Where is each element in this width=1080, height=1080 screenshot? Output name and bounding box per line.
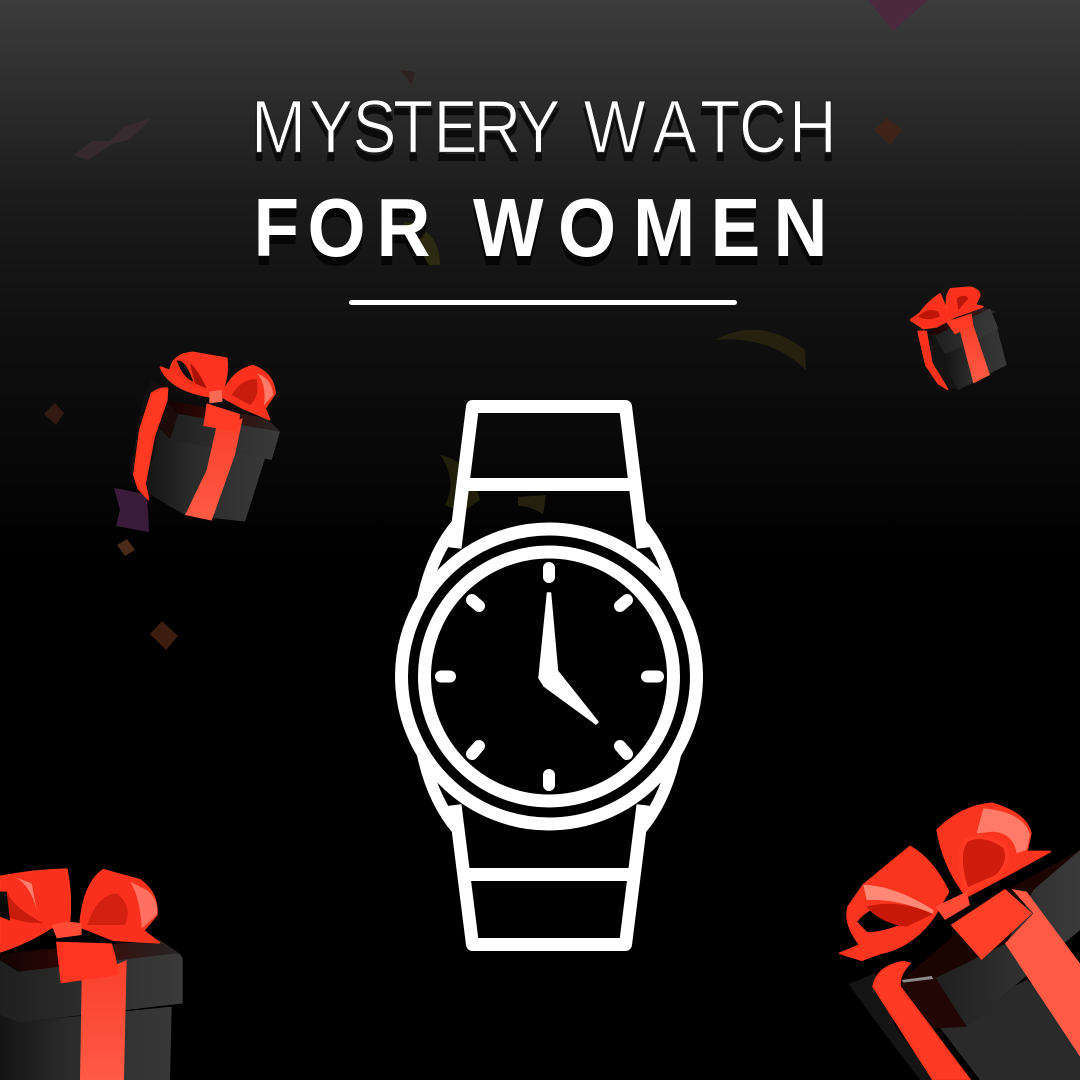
divider line under title <box>349 300 737 305</box>
gift: lower right <box>840 803 1080 1080</box>
title <box>251 85 837 274</box>
title line 2: FOR WOMEN: FOR WOMEN <box>254 181 827 274</box>
gift: lower left <box>0 869 183 1080</box>
gift: upper right <box>911 287 1007 390</box>
hour ticks <box>441 568 658 785</box>
bottom strap <box>455 805 643 944</box>
top strap <box>455 406 643 548</box>
icon: wristwatch <box>402 406 696 944</box>
confetti <box>44 0 928 650</box>
lugs <box>423 523 675 830</box>
title line 1: MYSTERY WATCH: MYSTERY WATCH <box>251 85 837 168</box>
gift: upper left <box>130 353 280 522</box>
dial ring <box>424 552 674 801</box>
case ring <box>402 529 696 824</box>
clock hands <box>539 593 598 724</box>
